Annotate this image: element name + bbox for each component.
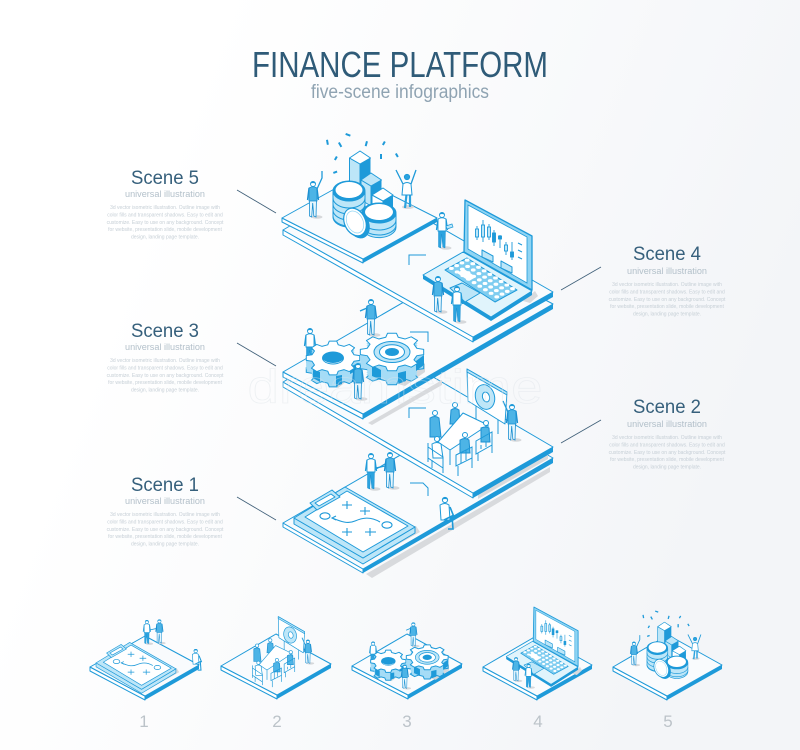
platform: scene 1	[283, 413, 553, 578]
scene 2 illustration	[428, 369, 522, 476]
presenter	[503, 401, 522, 442]
text block: scene 2: color fills and transparent shadows. Easy to edit and	[609, 442, 725, 448]
leader line: scene 1	[237, 497, 276, 520]
presentation screen	[467, 369, 507, 434]
man with tablet	[436, 212, 453, 250]
thumbnail 2	[221, 617, 331, 731]
text block: scene 1: design, landing page template.	[131, 542, 199, 548]
laptop screen	[464, 200, 532, 290]
text block: scene 2: for website, presentation slide, mobile development	[610, 457, 724, 463]
leader line: scene 2	[561, 420, 601, 443]
laptop	[423, 200, 538, 321]
text block: scene 2: design, landing page template.	[633, 464, 701, 470]
text block: scene 3: for website, presentation slide, mobile development	[108, 380, 222, 386]
text block: scene 1: 3d vector isometric illustration. Outline image with	[110, 512, 220, 518]
text block: scene 1: customize. Easy to use on any background. Concept	[107, 527, 224, 533]
thumbnail 2: 2	[272, 712, 282, 731]
text block: scene 3: customize. Easy to use on any background. Concept	[107, 373, 224, 379]
platform: scene 2	[283, 336, 553, 499]
left person	[304, 328, 320, 366]
text block: scene 4: color fills and transparent shadows. Easy to edit and	[609, 290, 725, 296]
text block: scene 5: 3d vector isometric illustration. Outline image with	[110, 205, 220, 211]
people shaking hands	[366, 452, 400, 491]
standing woman	[360, 299, 380, 337]
text block: scene 2: universal illustration	[627, 419, 707, 430]
text block: scene 2	[609, 396, 726, 470]
gear right	[360, 333, 425, 386]
text block: scene 1: for website, presentation slide, mobile development	[108, 534, 222, 540]
person upper left	[430, 410, 441, 437]
text block: scene 5	[107, 167, 224, 240]
thumbnail 5	[613, 610, 722, 731]
text block: scene 3: 3d vector isometric illustration. Outline image with	[110, 358, 220, 364]
text block: scene 5: color fills and transparent shadows. Easy to edit and	[107, 212, 223, 218]
watermark: dreamstime	[248, 360, 542, 413]
text block: scene 2: 3d vector isometric illustration. Outline image with	[612, 435, 722, 441]
text block: scene 1: Scene 1	[131, 474, 199, 496]
clipboard	[294, 487, 420, 564]
bar chart blocks	[350, 151, 393, 216]
scene 1 illustration	[294, 452, 454, 564]
text block: scene 4: Scene 4	[633, 243, 701, 265]
woman cheering	[396, 170, 416, 209]
text block: scene 5: customize. Easy to use on any background. Concept	[107, 220, 224, 226]
platform: scene 5	[282, 177, 437, 263]
text block: scene 1: color fills and transparent shadows. Easy to edit and	[107, 520, 223, 526]
text block: scene 3: design, landing page template.	[131, 388, 199, 394]
scene 5 illustration	[308, 133, 416, 242]
text block: scene 2: customize. Easy to use on any background. Concept	[609, 450, 726, 456]
scene 3 illustration	[304, 299, 425, 401]
text block: scene 5: universal illustration	[125, 189, 205, 200]
person right with chair	[476, 420, 492, 461]
thumbnail 1: 1	[139, 712, 149, 731]
text block: scene 3	[107, 320, 224, 394]
thumbnail 4: 4	[533, 712, 543, 731]
text block: scene 1	[107, 474, 224, 548]
subtitle: five-scene infographics	[311, 82, 489, 103]
text block: scene 3: color fills and transparent shadows. Easy to edit and	[107, 366, 223, 372]
seated man	[440, 497, 454, 529]
keyboard	[445, 258, 517, 302]
thumbnail 1	[90, 619, 202, 731]
text block: scene 4: for website, presentation slide, mobile development	[610, 304, 724, 310]
text block: scene 3: Scene 3	[131, 320, 199, 342]
person left with chair	[428, 436, 443, 473]
platform: scene 4	[283, 183, 553, 342]
text block: scene 5: for website, presentation slide, mobile development	[108, 227, 222, 233]
scene 4 illustration	[423, 200, 538, 324]
touchpad	[450, 283, 480, 302]
title: FINANCE PLATFORM	[252, 44, 548, 85]
text block: scene 4: 3d vector isometric illustration. Outline image with	[612, 282, 722, 288]
leader line: scene 4	[561, 267, 601, 290]
text block: scene 1: universal illustration	[125, 496, 205, 507]
thumbnail 3	[352, 622, 462, 731]
text block: scene 5: design, landing page template.	[131, 234, 199, 240]
text block: scene 4	[609, 243, 726, 318]
man waving	[308, 171, 322, 219]
coin stack short	[362, 203, 396, 238]
text block: scene 5: Scene 5	[131, 167, 199, 189]
thumbnail 5: 5	[663, 712, 673, 731]
person front with chair	[456, 432, 472, 476]
leader line: scene 5	[237, 190, 276, 213]
gear left	[306, 341, 360, 388]
candlestick chart	[476, 220, 514, 260]
confetti	[326, 133, 399, 174]
leader line: scene 3	[237, 343, 276, 366]
person back	[450, 402, 460, 424]
text block: scene 4: design, landing page template.	[633, 312, 701, 318]
front man	[352, 363, 368, 401]
text block: scene 4: universal illustration	[627, 266, 707, 277]
leaning coin	[339, 204, 374, 242]
text block: scene 3: universal illustration	[125, 342, 205, 353]
two men	[432, 276, 466, 324]
text block: scene 2: Scene 2	[633, 396, 701, 418]
coin stack tall	[333, 181, 365, 227]
text block: scene 4: customize. Easy to use on any background. Concept	[609, 297, 726, 303]
table	[438, 413, 488, 450]
platform: scene 3	[283, 262, 553, 425]
meeting table with chairs and people	[428, 402, 492, 476]
thumbnail 3: 3	[402, 712, 412, 731]
thumbnail 4	[483, 607, 592, 731]
